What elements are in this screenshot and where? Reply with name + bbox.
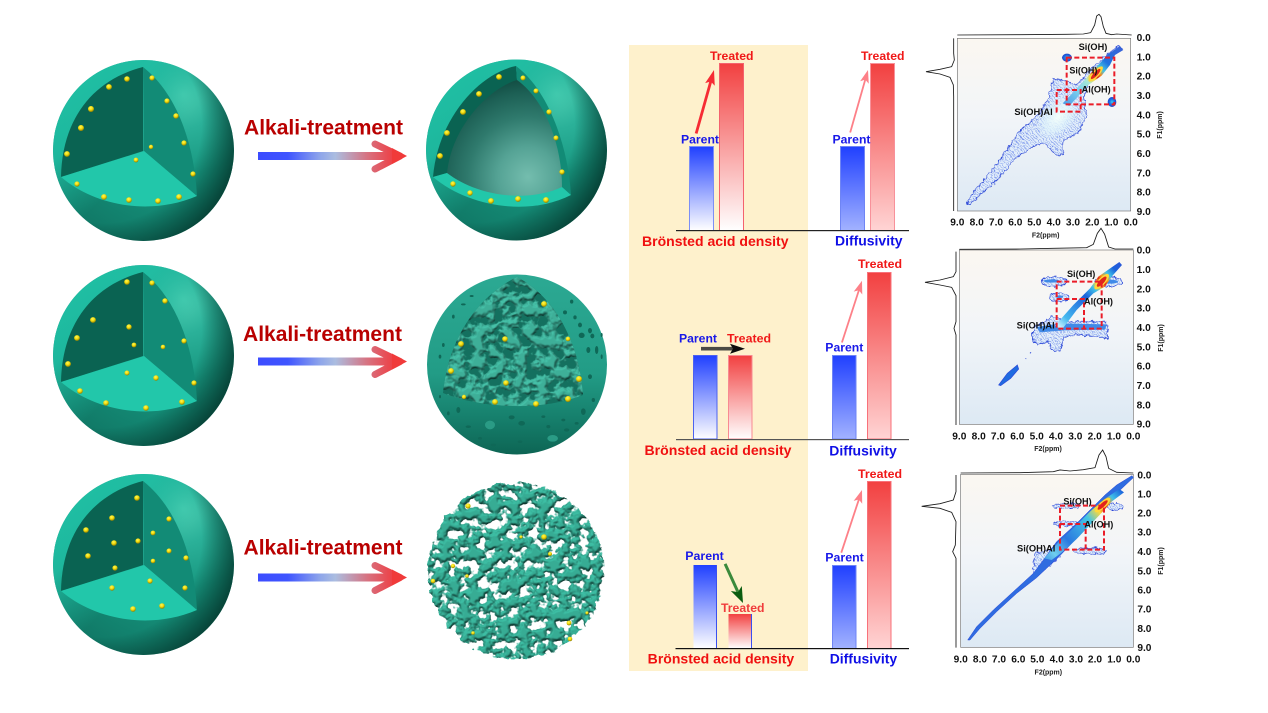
right axis numbers: 2.0 [1137, 72, 1151, 83]
peak label Al(OH): Al(OH) [1082, 84, 1111, 94]
diagonal ridge [1055, 262, 1122, 330]
panel: yellow background for Bronsted acid density [629, 45, 808, 671]
label: parent diffusivity: Parent [825, 551, 864, 565]
bottom axis numbers: 8.0 [970, 218, 984, 229]
axis line [676, 439, 909, 440]
caption: Bronsted acid density: Brönsted acid density [642, 233, 789, 249]
row 3: parent sphere [53, 474, 234, 655]
label: treated: Treated [721, 601, 764, 615]
bar: treated diffusivity [870, 64, 894, 230]
label: parent diffusivity: Parent [832, 133, 870, 147]
right axis numbers [1137, 33, 1151, 218]
right axis numbers: 6.0 [1137, 585, 1152, 596]
axis title F1: F1(ppm) [1157, 111, 1164, 139]
right axis numbers: 0.0 [1137, 246, 1151, 257]
arrow: acid density down [720, 561, 748, 605]
right axis numbers: 6.0 [1137, 362, 1151, 373]
caption: Diffusivity: Diffusivity [835, 233, 903, 249]
bottom axis numbers: 2.0 [1085, 218, 1100, 229]
label: treated diffusivity: Treated [858, 467, 902, 481]
top projection [957, 14, 1132, 35]
axis title F2: F2(ppm) [1035, 669, 1062, 676]
bottom axis numbers: 0.0 [1126, 431, 1141, 442]
label: parent: Parent [685, 549, 724, 563]
row 2: gradient arrow [258, 350, 407, 374]
bar: parent diffusivity [840, 146, 864, 230]
bottom axis numbers: 7.0 [992, 654, 1006, 665]
diagonal ridge [1044, 489, 1124, 560]
peak label Al(OH): Al(OH) [1084, 296, 1113, 306]
row 2: bar charts [644, 257, 909, 459]
peak label Si(OH) top: Si(OH) [1079, 42, 1107, 52]
contours: cross peaks [1033, 503, 1123, 575]
caption: Diffusivity: Diffusivity [830, 651, 897, 667]
bottom axis numbers: 3.0 [1068, 431, 1083, 442]
bottom axis numbers [954, 654, 1141, 665]
bar: parent diffusivity [832, 566, 856, 648]
arrow: acid density unchanged [701, 344, 745, 354]
row 2: parent sphere [53, 265, 234, 446]
top projection [961, 450, 1133, 473]
bottom axis numbers: 8.0 [972, 431, 986, 442]
label: treated: Treated [710, 49, 754, 63]
dashed box small [1057, 90, 1081, 112]
left projection [925, 252, 956, 425]
bottom axis numbers: 5.0 [1027, 218, 1042, 229]
axis title F1: F1(ppm) [1158, 324, 1165, 352]
bottom axis numbers [950, 218, 1138, 229]
bottom axis numbers: 9.0 [952, 431, 967, 442]
label: parent: Parent [681, 132, 719, 146]
bar: parent acid density [690, 146, 714, 230]
bottom axis numbers: 9.0 [954, 654, 968, 665]
right axis numbers: 4.0 [1137, 547, 1152, 558]
right axis numbers: 4.0 [1137, 323, 1151, 334]
label: treated: Treated [727, 331, 771, 345]
bar edges [716, 565, 752, 648]
peak label Al(OH): Al(OH) [1084, 520, 1113, 530]
right axis numbers: 4.0 [1137, 110, 1151, 121]
bottom axis numbers: 2.0 [1088, 431, 1102, 442]
label: parent diffusivity: Parent [825, 341, 863, 355]
bottom axis numbers: 1.0 [1104, 218, 1119, 229]
label: treated diffusivity: Treated [861, 49, 904, 63]
bottom axis numbers: 6.0 [1011, 654, 1026, 665]
right axis numbers: 3.0 [1137, 91, 1151, 102]
bottom axis numbers: 0.0 [1124, 218, 1138, 229]
right axis numbers: 5.0 [1137, 342, 1151, 353]
hot spot [1092, 272, 1111, 291]
plot area [961, 474, 1133, 647]
row 3: gradient arrow [258, 566, 407, 590]
bottom axis numbers: 8.0 [973, 654, 987, 665]
plot area [957, 38, 1131, 211]
right axis numbers: 3.0 [1137, 528, 1152, 539]
bar: parent diffusivity [832, 356, 856, 439]
axis line [676, 648, 909, 649]
right axis numbers: 8.0 [1137, 400, 1151, 411]
bar: treated acid density [728, 614, 752, 648]
axis line [676, 230, 909, 231]
row 3: bar charts [648, 467, 909, 667]
label: parent: Parent [679, 331, 717, 345]
right axis numbers: 7.0 [1137, 168, 1151, 179]
bottom axis numbers: 3.0 [1066, 218, 1080, 229]
row 3: Alkali-treatment label: Alkali-treatment [244, 537, 402, 560]
row 1: parent sphere [53, 60, 234, 241]
left projection [922, 475, 956, 648]
right axis numbers: 9.0 [1137, 420, 1151, 431]
cross peak cores [1037, 279, 1118, 332]
right axis numbers: 3.0 [1137, 304, 1151, 315]
bar: treated diffusivity [868, 272, 891, 439]
row 1: gradient arrow [258, 144, 407, 169]
bottom axis numbers: 9.0 [950, 218, 965, 229]
cross peak lower right [1108, 97, 1116, 107]
bottom axis numbers: 2.0 [1088, 654, 1102, 665]
row 1: 2D NMR spectrum [926, 14, 1164, 239]
right axis numbers: 2.0 [1137, 284, 1151, 295]
right axis numbers: 8.0 [1137, 188, 1151, 199]
right axis numbers: 8.0 [1137, 624, 1152, 635]
right axis numbers: 0.0 [1137, 470, 1152, 481]
bottom axis numbers [952, 431, 1141, 442]
arrow: acid density up [691, 69, 719, 135]
row 1: hollow treated sphere [426, 60, 607, 240]
dashed box large [1067, 58, 1114, 104]
bottom axis numbers: 6.0 [1008, 218, 1023, 229]
row 1: Alkali-treatment label: Alkali-treatment [244, 116, 403, 140]
bottom axis numbers: 5.0 [1030, 654, 1045, 665]
plot area [959, 250, 1133, 424]
small dots [1026, 352, 1031, 359]
bar: parent acid density [694, 356, 717, 439]
cross peak upper left [1062, 54, 1072, 62]
right axis numbers: 1.0 [1137, 52, 1151, 63]
arrow: diffusivity up [846, 69, 872, 134]
bottom axis numbers: 7.0 [989, 218, 1003, 229]
right axis numbers: 9.0 [1137, 643, 1152, 654]
right axis numbers: 5.0 [1137, 566, 1152, 577]
right axis numbers: 7.0 [1137, 605, 1152, 616]
axis title F2: F2(ppm) [1034, 446, 1062, 453]
peak label Si(OH)Al: Si(OH)Al [1014, 107, 1053, 117]
contours: cross peaks [1032, 277, 1122, 351]
bottom axis numbers: 1.0 [1107, 654, 1122, 665]
bottom axis numbers: 1.0 [1107, 431, 1121, 442]
row 3: disintegrated treated sphere [428, 483, 604, 659]
right axis numbers: 6.0 [1137, 149, 1151, 160]
arrow: diffusivity up [837, 489, 866, 554]
bottom axis numbers: 4.0 [1050, 654, 1064, 665]
bottom axis numbers: 5.0 [1030, 431, 1044, 442]
isolated peak lower left [999, 365, 1019, 386]
caption: Bronsted acid density: Brönsted acid density [648, 651, 794, 667]
peak label Si(OH)Al: Si(OH)Al [1017, 320, 1055, 330]
row 1: bar charts [642, 49, 909, 249]
right axis numbers [1137, 246, 1151, 431]
bar: treated acid density [720, 64, 744, 230]
dashed box inner [1057, 299, 1084, 329]
diagonal ridge [1063, 46, 1123, 106]
right axis numbers: 5.0 [1137, 130, 1151, 141]
peak label Si(OH): Si(OH) [1067, 269, 1095, 279]
contours: broad pale region [967, 47, 1122, 205]
bottom axis numbers: 4.0 [1049, 431, 1063, 442]
peak label Si(OH): Si(OH) [1063, 496, 1092, 506]
right axis numbers: 2.0 [1137, 509, 1152, 520]
hot spot [1093, 496, 1112, 514]
label: treated diffusivity: Treated [858, 257, 902, 271]
top projection [959, 228, 1133, 249]
bottom axis numbers: 4.0 [1047, 218, 1061, 229]
right axis numbers: 1.0 [1137, 265, 1151, 276]
bottom axis numbers: 3.0 [1069, 654, 1083, 665]
right axis numbers: 1.0 [1137, 489, 1152, 500]
dashed box outer [1057, 282, 1102, 329]
dashed box outer [1060, 506, 1104, 550]
row 2: 2D NMR spectrum [925, 228, 1165, 453]
peak label Si(OH) middle: Si(OH) [1069, 65, 1097, 75]
right axis numbers [1137, 470, 1152, 654]
bottom axis numbers: 7.0 [991, 431, 1005, 442]
caption: Diffusivity: Diffusivity [829, 443, 897, 459]
axis title F1: F1(ppm) [1158, 547, 1165, 575]
bar: parent acid density [694, 565, 717, 648]
bar: treated diffusivity [868, 482, 891, 648]
arrow: diffusivity up [838, 279, 866, 344]
row 2: mesoporous treated sphere [427, 270, 607, 454]
right axis numbers: 7.0 [1137, 381, 1151, 392]
outer diagonal contour [968, 476, 1133, 640]
hot spot [1086, 64, 1105, 84]
contour centre glow [1027, 84, 1089, 149]
right axis numbers: 9.0 [1137, 207, 1151, 218]
bottom axis numbers: 0.0 [1126, 654, 1141, 665]
axis title F2: F2(ppm) [1032, 232, 1059, 239]
caption: Bronsted acid density: Brönsted acid density [644, 442, 792, 458]
row 2: Alkali-treatment label: Alkali-treatment [243, 323, 402, 346]
dashed box inner [1060, 524, 1086, 550]
peak label Si(OH)Al: Si(OH)Al [1017, 544, 1055, 554]
bottom axis numbers: 6.0 [1010, 431, 1025, 442]
bar: treated acid density [728, 356, 752, 439]
row 3: 2D NMR spectrum [922, 450, 1165, 676]
right axis numbers: 0.0 [1137, 33, 1151, 44]
left projection [926, 38, 954, 211]
